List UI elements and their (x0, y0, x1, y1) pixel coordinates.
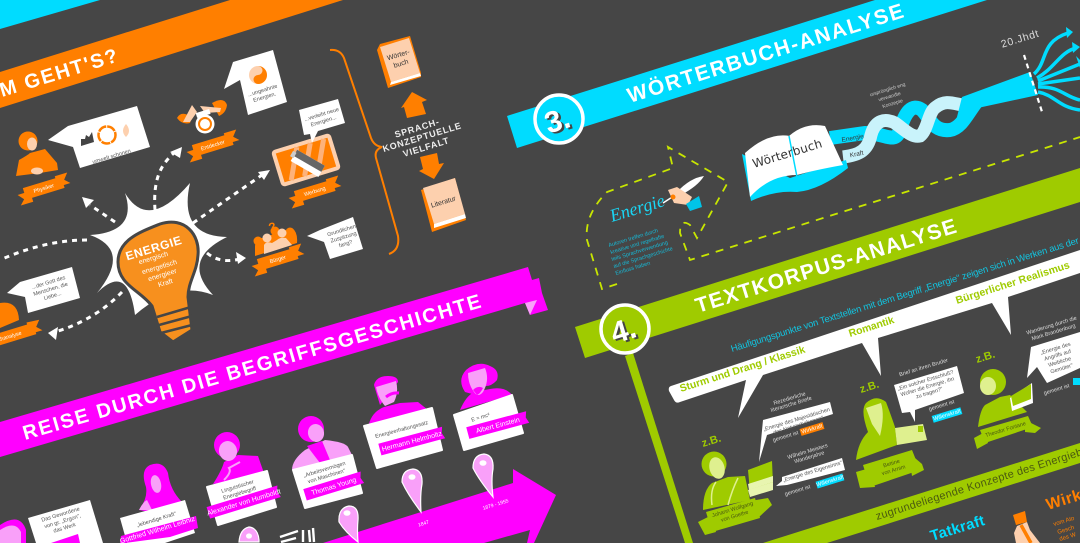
trunk (955, 72, 1038, 125)
ribbon: Bettine (856, 450, 924, 488)
text: Autoren: Autoren treffen durch (608, 228, 659, 249)
text: vom Atom: vom Ato (1053, 516, 1076, 528)
card: Humboldt: Linguistischer (221, 479, 255, 495)
ribbon: Fontane: Theodor Fontane (985, 421, 1027, 439)
speech bubble: der Gott des Menschen: Menschen, die (33, 282, 69, 298)
callout: Brief: Woher die Energie, ihn (900, 376, 955, 398)
card: Ergon: von gr. „Ergon", (44, 513, 82, 530)
labels: Energie, Kraft: Kraft (849, 150, 864, 159)
callout: Brief: „Ein solcher Entschluß? (897, 370, 954, 392)
label: sprachkonzeptuelle Vielfalt: SPRACH- (393, 117, 441, 140)
heading band: magenta (0, 267, 548, 457)
ribbon: Sprachanalyse (0, 319, 43, 351)
icon: book Literatur (421, 178, 466, 232)
icon: person with tie (1013, 511, 1040, 543)
callout: Wanderung: Wanderung durch die (1026, 316, 1078, 337)
callout: Brief: Willenskraft (933, 408, 962, 423)
speech bubble: Grundlichen: Grundlichen (327, 224, 357, 238)
text: vom Atom: des W (1059, 532, 1077, 543)
band: zugrundeliegende Konzepte (763, 443, 1080, 543)
icon: physicist figure (16, 132, 58, 176)
text: ursprünglich eng verwandte Konzepte (869, 82, 906, 110)
card: Young: „Arbeitsvermögen (303, 461, 346, 479)
text: ursprünglich eng verwandte Konzepte: ursprünglich eng (869, 82, 906, 98)
text: Autoren (608, 228, 674, 277)
card: Ergon: Das Gewordene (41, 506, 81, 524)
portrait: Helmholtz (369, 376, 428, 424)
speech bubble: der Gott des Menschen: Liebe... (43, 291, 63, 302)
number badge: 3: 3. (541, 102, 574, 140)
heading band: cyan: WÖRTERBUCH-ANALYSE (625, 0, 906, 108)
callout: Wanderung: Gemüter" (1050, 363, 1074, 375)
card: Humboldt: Energiebegriff (223, 486, 257, 502)
label: z.B.: z.B. (700, 433, 723, 450)
callout: Wörterbuch quote: Rezedierliche (773, 391, 807, 407)
heading band: orange (0, 0, 343, 108)
speech bubble: ungeahnte Energien: Energien. (253, 91, 277, 104)
icon: light bulb: energisch (138, 251, 169, 266)
icon: open book (742, 125, 848, 201)
icon: open book: Wörterbuch (751, 136, 824, 171)
era banner with callouts (669, 250, 1080, 418)
script: Energie: Energie (606, 190, 667, 226)
speech bubble: verleiht neue Energien (299, 99, 345, 143)
callout: Wanderung: Mark Brandenburg (1031, 323, 1076, 342)
branching strands (1034, 33, 1080, 110)
card: Einstein (454, 395, 529, 450)
card: Leibniz (119, 500, 198, 543)
callout: Wanderjahre quote: gemeint ist (784, 484, 812, 498)
heading band: orange: M GEHT'S? (0, 45, 120, 102)
callout: Wanderjahre quote (776, 443, 845, 498)
icon: book Wörterbuch: buch (393, 59, 410, 70)
speech bubble: umwelt schonen: umwelt schonen (92, 148, 132, 166)
portrait: Fontane (978, 369, 1033, 427)
callout: Brief: gemeint ist (928, 399, 956, 413)
card: Helmholtz (364, 408, 445, 468)
number badge: 3: 3. (543, 103, 577, 142)
card: Helmholtz: Energieerhaltungssatz (375, 420, 429, 440)
ribbon: Goethe: Johann Wolfgang (711, 501, 754, 519)
callout: Wanderjahre quote: Wilhelm Meisters (787, 443, 829, 461)
heading band: green (575, 168, 1080, 543)
callout: Wanderung: „Energie des (1040, 342, 1072, 356)
brace (330, 50, 398, 254)
ribbon: Goethe: von Goethe (720, 510, 749, 524)
arrow: up (401, 92, 427, 118)
icon: Werbung battery sign (271, 133, 341, 187)
label: sprachkonzeptuelle Vielfalt: VIELFALT (402, 135, 451, 159)
label: z.B. (700, 349, 997, 450)
labels: Energie, Kraft (841, 133, 865, 159)
speech bubble: Grundlichen: fang? (338, 240, 353, 249)
card: Leibniz: „lebendige Kraft" (136, 511, 177, 529)
pins (239, 454, 493, 542)
text: vom Atom: Gesch (1057, 525, 1075, 536)
number badge: 4: 4. (607, 312, 640, 350)
speech bubble: ungeahnte Energien (224, 50, 287, 115)
ribbon: Bettine: von Arnim (881, 464, 907, 477)
icon: book Wörterbuch: Wörter- (386, 49, 411, 62)
icon: light bulb (90, 183, 227, 342)
timeline arrow: 1847 (418, 519, 430, 529)
portrait: Humboldt (213, 432, 265, 484)
callout: Wörterbuch quote (759, 390, 833, 462)
callout: Wanderung: gemeint ist (1043, 383, 1071, 397)
label: z.B.: z.B. (974, 349, 997, 366)
icon: Entdecker figure (177, 100, 227, 134)
ribbon: Goethe (698, 498, 772, 535)
arrowheads (48, 147, 270, 340)
speech bubble: Grundlichen (307, 217, 363, 259)
card: Young (293, 455, 364, 508)
callout: Wanderung: Angriffs auf (1044, 349, 1072, 363)
card: Humboldt (205, 471, 282, 525)
card: Young: Thomas Young (311, 477, 357, 497)
icon: books Goethe (748, 461, 773, 497)
card: Einstein: E = mc² (471, 412, 491, 424)
text: Autoren: auf die Sprachgeschichte (613, 246, 674, 270)
card: Einstein: Albert Einstein (475, 417, 521, 435)
callout: Wörterbuch quote: literarische Briefe (770, 396, 813, 414)
portrait: Leibniz (139, 464, 182, 512)
callout: Wanderjahre quote: Wanderjahre (794, 450, 825, 465)
text: Autoren: kreative und regelhafte (610, 234, 665, 256)
subheading: Häufigungspunkte von Textstellen mit dem Begriff „Energie“ zeigen sich in Werken aus der (730, 236, 1080, 355)
ribbon: Bürger (250, 243, 306, 277)
timeline arrow (323, 469, 556, 543)
callout: Brief: zu tragen?" (915, 387, 944, 400)
ribbon: Physiker (16, 172, 72, 206)
labels: Energie, Kraft: Energie (841, 133, 865, 144)
ribbon: Werbung (287, 175, 343, 209)
arrow: dashed outline (587, 137, 1080, 289)
icon: Bürger group: ? (267, 219, 278, 235)
ribbon: Fontane (974, 416, 1041, 449)
portrait: Goethe (702, 452, 750, 510)
icon: machinery (280, 528, 314, 542)
icon: light bulb: energieer (147, 268, 178, 283)
portrait: Bettine (856, 398, 927, 460)
speech bubble: der Gott des Menschen: ...der Gott des (31, 275, 66, 291)
text: ursprünglich eng verwandte Konzepte: verwandte (878, 91, 902, 103)
card: Ergon (28, 500, 103, 543)
icon: hand with quill (663, 176, 704, 211)
speech bubble: verleiht neue Energien: ...verleiht neue (304, 107, 340, 123)
era banner with callouts: Bürgerlicher Realismus (954, 259, 1071, 307)
number badge: 4: 4. (609, 313, 643, 352)
callout: Wörterbuch quote: gemeint ist (772, 430, 800, 444)
callout: Wörterbuch quote: Wirkkraft (801, 423, 824, 436)
ribbon: Werbung: Werbung (303, 186, 327, 198)
text: ursprünglich eng verwandte Konzepte: Konzepte (882, 98, 904, 110)
callout: Wanderung (1026, 316, 1080, 397)
panel: Begriffsgeschichte (0, 267, 556, 543)
callout: Wanderjahre quote: „Energie des Eigensinns" (782, 460, 843, 484)
portrait: Young (292, 416, 352, 470)
ribbon: Entdecker: Entdecker (200, 139, 226, 152)
label: sprachkonzeptuelle Vielfalt: KONZEPTUELLE (381, 120, 463, 154)
ribbon: Bettine: Bettine (883, 459, 901, 469)
panel: Wörterbuch-Analyse (507, 0, 1080, 289)
card: Humboldt: Alexander von Humboldt (206, 488, 282, 518)
cyan corner band (0, 0, 100, 29)
number badge: 4 (601, 305, 649, 353)
card: Young: von Maschinen" (307, 468, 346, 485)
icon: Bürger group (254, 219, 297, 256)
icon: light bulb: ENERGIE (124, 233, 184, 263)
speech bubble: Grundlichen: Zuspitzung (330, 231, 357, 245)
card: Helmholtz: Hermann Helmholtz (381, 430, 443, 453)
panel: wem geht's (0, 0, 466, 351)
icon: book Wörterbuch (377, 36, 421, 88)
icon: light bulb: energetisch (141, 259, 178, 276)
heading band: green: TEXTKORPUS-ANALYSE (693, 215, 959, 318)
text: vom Atom (1053, 516, 1077, 543)
number badge: 3 (535, 95, 583, 143)
era banner with callouts: Romantik (847, 314, 896, 340)
panel: Textkorpus-Analyse (575, 168, 1080, 543)
callout: Wanderung: Weibliche (1048, 356, 1072, 369)
heading band: cyan (507, 0, 987, 148)
speech bubble: verleiht neue Energien: Energien... (310, 115, 338, 128)
callout: Brief (894, 358, 964, 423)
arrows: dashed from bulb (0, 152, 262, 332)
ribbon: Physiker: Physiker (33, 183, 55, 195)
heading band: magenta: REISE DURCH DIE BEGRIFFSGESCHICHTE (20, 291, 483, 445)
speech bubble: umwelt schonen (48, 106, 150, 168)
icon: light bulb: Kraft (157, 278, 174, 289)
arrow: down (419, 153, 444, 179)
text: Autoren: teils Sprachverwendung (611, 240, 669, 263)
icon: lower-left figure (0, 303, 19, 328)
ribbon: Entdecker (185, 129, 241, 163)
ribbon: Bürger: Bürger (269, 255, 287, 265)
ribbons: Energie and Kraft (830, 100, 978, 157)
speech bubble: der Gott des Menschen (7, 267, 80, 313)
era banner with callouts: Sturm und Drang / Klassik (678, 344, 807, 395)
callout: Wanderjahre quote: Willenskraft (816, 474, 845, 489)
portrait: head lower-left (0, 520, 26, 543)
callout: Wörterbuch quote: „Energie des Majestätischen (763, 407, 831, 433)
text: Autoren: Einfluss haben (615, 261, 651, 277)
timeline arrow: 1879 - 1955 (482, 498, 510, 512)
strand arrowheads (1066, 27, 1080, 68)
callout: Wörterbuch quote: des Naturerhabenen" (773, 415, 824, 436)
icon: book Literatur: Literatur (430, 195, 457, 210)
pin centres (246, 460, 486, 539)
speech bubble: ungeahnte Energien: ...ungeahnte (247, 84, 278, 98)
label: z.B.: z.B. (858, 379, 881, 396)
card: Ergon: das Werk (53, 522, 77, 535)
label: 20.Jhdt: 20.Jhdt (1000, 28, 1041, 51)
callout: Brief: Brief an ihren Bruder (899, 358, 949, 378)
portrait: Einstein (460, 364, 512, 410)
dashed 20th century marker (1024, 55, 1043, 115)
